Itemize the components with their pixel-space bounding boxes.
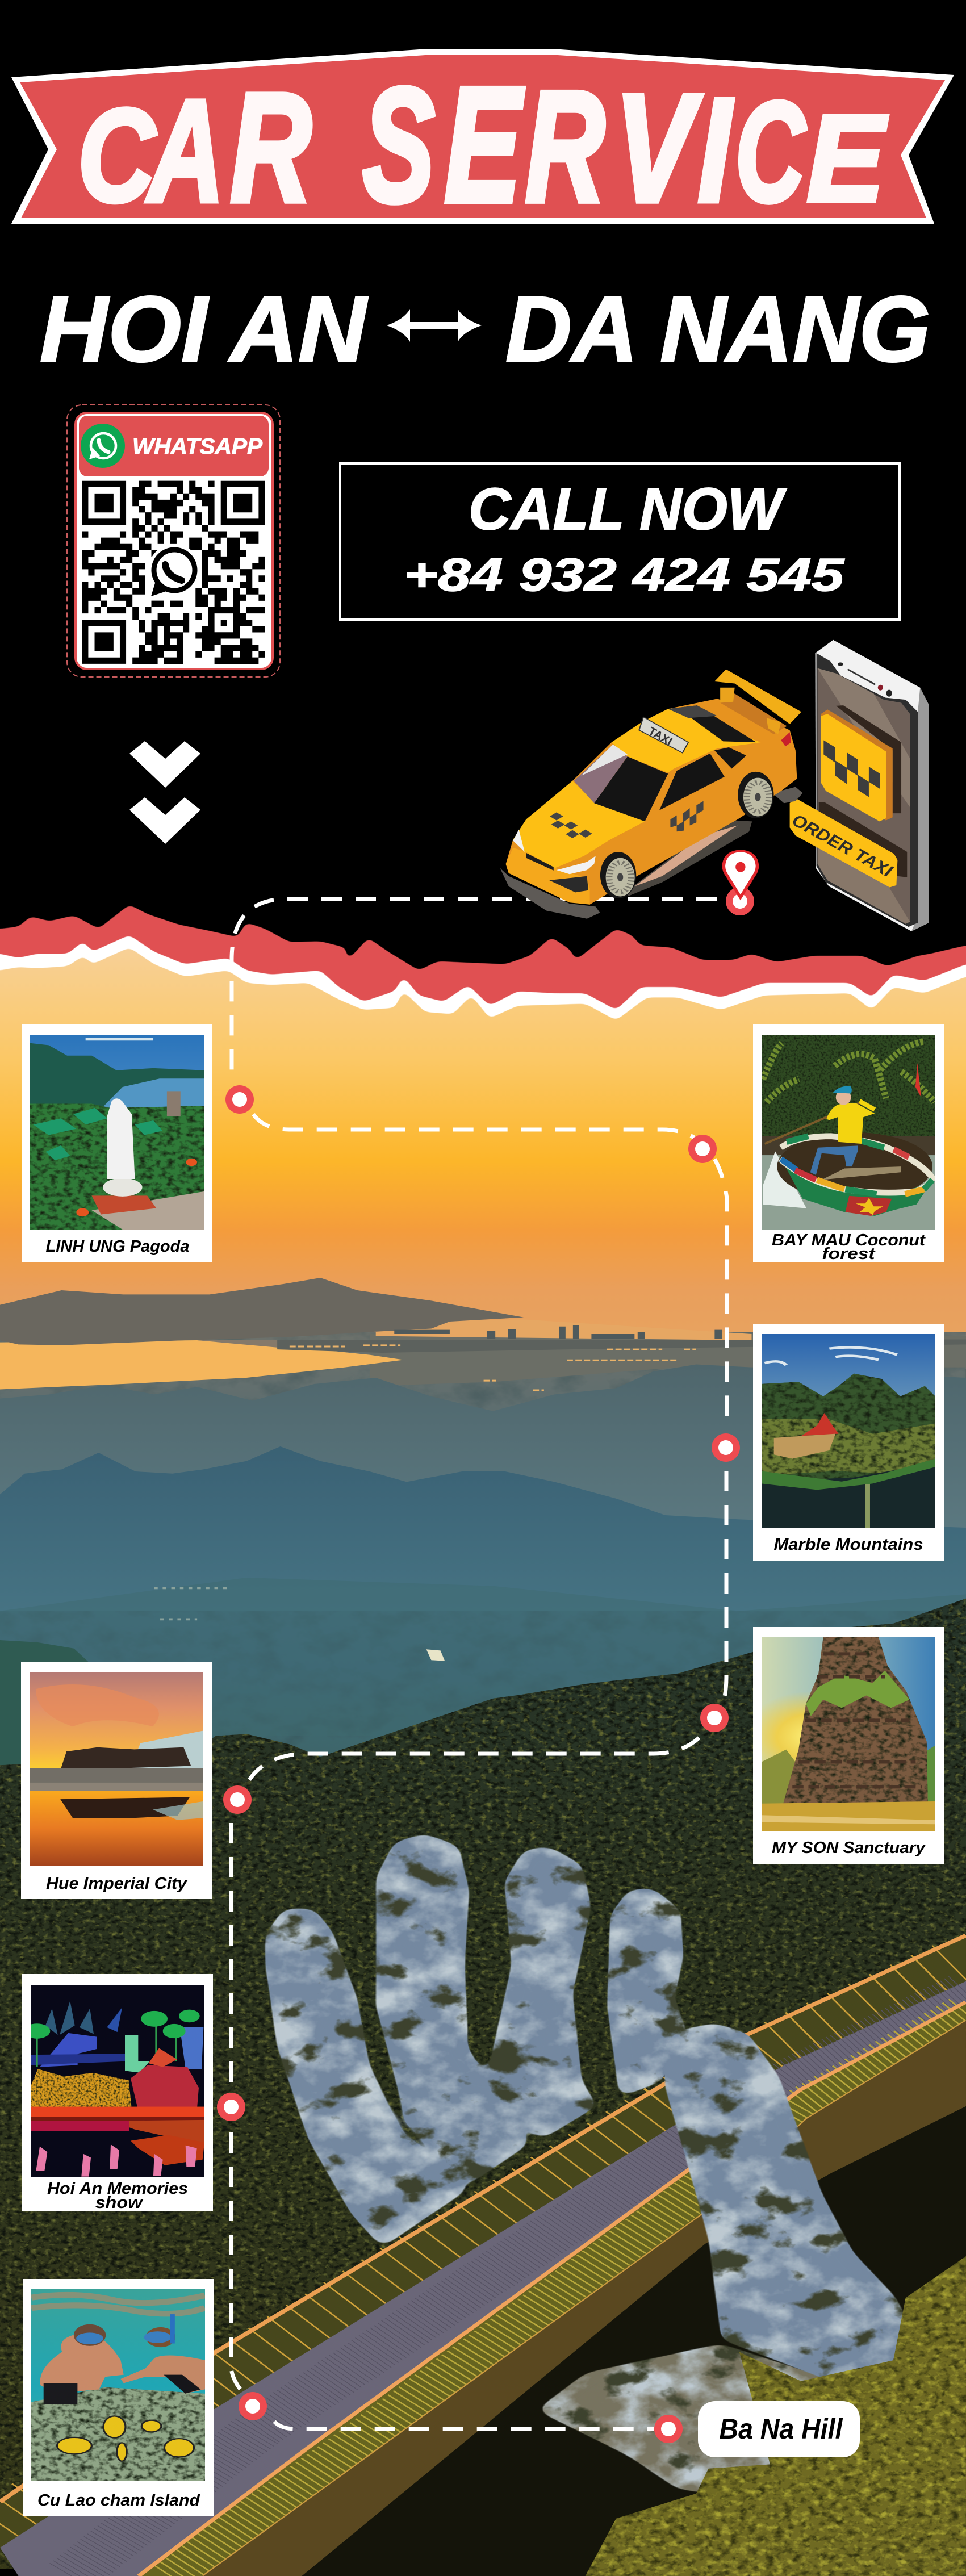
- WhatsApp logo in QR centre: [147, 544, 200, 600]
- golden bridge: [0, 1935, 966, 2576]
- palm of the hand: [536, 2344, 943, 2494]
- title letters: A: [146, 70, 224, 232]
- card: Marble Mountains: [753, 1324, 944, 1561]
- illustration: taxi and smartphone: [500, 640, 929, 931]
- title letters: E: [807, 90, 888, 227]
- panel: call now: +84 932 424 545: [404, 549, 845, 601]
- card: BAY MAU Coconut forest: [753, 1024, 944, 1263]
- title letters: [78, 53, 888, 236]
- smartphone: [790, 640, 929, 931]
- banner: CAR SERVICE: [11, 49, 954, 236]
- title letters: C: [78, 81, 157, 229]
- taxi sign label: TAXI: [646, 725, 674, 748]
- order taxi label: ORDER TAXI: [789, 810, 896, 881]
- title letters: I: [698, 68, 733, 233]
- car shadows and underglow: [500, 787, 803, 919]
- card: Cu Lao cham Island: Cu Lao cham Island: [37, 2491, 200, 2510]
- panel: WhatsApp QR code: [67, 405, 280, 677]
- photo: My Son tower: [762, 1637, 935, 1831]
- icon: location pin: [724, 851, 757, 897]
- title letters: E: [445, 53, 524, 236]
- photo: basket boat: [762, 1035, 935, 1230]
- checker decals: [550, 801, 704, 838]
- card: Hue Imperial City: Hue Imperial City: [46, 1875, 188, 1893]
- forested hill: [0, 1599, 966, 2569]
- photo: Hue Imperial City: [30, 1672, 203, 1866]
- foreground trees: [586, 2256, 966, 2576]
- card: Marble Mountains: Marble Mountains: [773, 1536, 923, 1554]
- yellow taxi body: [506, 670, 801, 905]
- QR code modules: [82, 481, 265, 664]
- card: Hoi An Memories show: show: [95, 2194, 144, 2212]
- giant hand fingers: [265, 1833, 687, 2248]
- card: MY SON Sanctuary: [743, 1627, 944, 1864]
- card: Hoi An Memories show: [22, 1974, 213, 2212]
- panel: call now: [340, 463, 900, 620]
- roof taxi sign: [639, 717, 688, 753]
- torn paper wave divider: [0, 500, 966, 1021]
- route heading: HOI AN to DA NANG: [40, 277, 930, 381]
- title letters: R: [231, 61, 311, 234]
- photo: Hoi An Memories show: [31, 1985, 204, 2177]
- photo: Marble Mountains: [762, 1334, 935, 1528]
- card: Hoi An Memories show: Hoi An Memories: [47, 2180, 188, 2198]
- route heading: HOI AN to DA NANG: HOI AN: [40, 277, 369, 381]
- title letters: V: [615, 63, 702, 234]
- dashed route line: [231, 899, 727, 2429]
- panel: call now: CALL NOW: [469, 476, 787, 542]
- valley and mountains: [0, 1278, 966, 1874]
- background photo: Ba Na Hills landscape: [0, 937, 966, 2576]
- icon: two-way arrow: [387, 309, 482, 342]
- photo: Linh Ung pagoda: [30, 1035, 204, 1230]
- sunset sky: [0, 937, 966, 1369]
- route heading: HOI AN to DA NANG: DA NANG: [505, 277, 930, 381]
- label: Ba Na Hill: Ba Na Hill: [719, 2413, 843, 2445]
- dark ground below the bridge: [302, 2106, 966, 2576]
- card: MY SON Sanctuary: MY SON Sanctuary: [772, 1839, 926, 1857]
- card: BAY MAU Coconut forest: BAY MAU Coconut: [772, 1231, 926, 1249]
- card: LINH UNG Pagoda: [22, 1024, 212, 1262]
- route stop markers: [217, 887, 754, 2443]
- title letters: S: [363, 55, 434, 236]
- card: Cu Lao cham Island: [23, 2279, 214, 2516]
- WhatsApp header: WHATSAPP: [132, 434, 263, 459]
- title letters: C: [735, 73, 806, 232]
- card: LINH UNG Pagoda: LINH UNG Pagoda: [45, 1237, 190, 1256]
- label: Ba Na Hill: [698, 2401, 860, 2457]
- card: Hue Imperial City: [21, 1662, 212, 1899]
- icon: double chevron down: [129, 741, 200, 844]
- wheels: [600, 772, 774, 898]
- card: BAY MAU Coconut forest: forest: [822, 1245, 876, 1263]
- photo: Cu Lao Cham snorkelling: [31, 2289, 205, 2481]
- WhatsApp header: [79, 416, 269, 476]
- thumb in front of the bridge: [662, 2023, 946, 2435]
- title letters: R: [525, 58, 605, 235]
